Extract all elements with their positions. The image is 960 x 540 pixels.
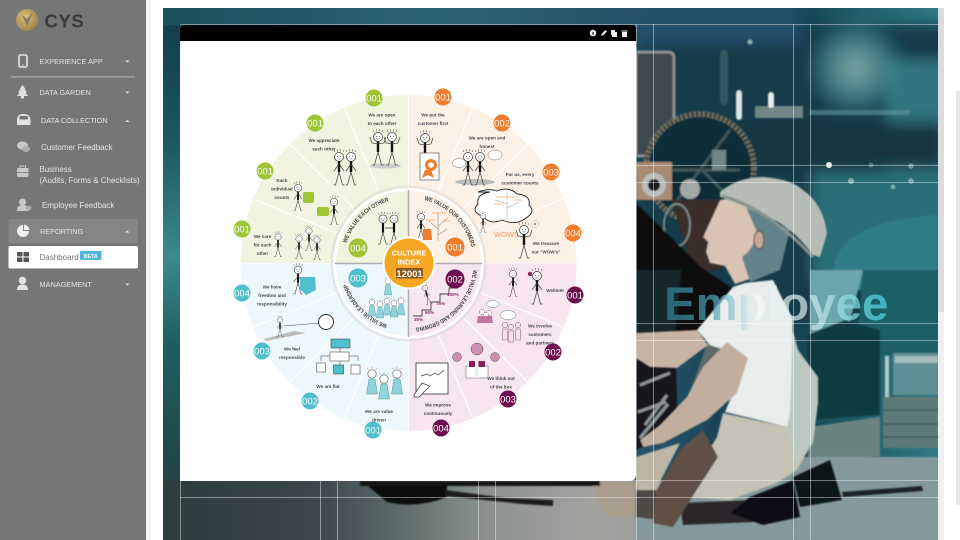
statement: we treasure our wows: We treasure <box>533 241 560 246</box>
statement: we are open to each other: We are open <box>368 112 396 118</box>
statement: we put the customer first: customer first <box>418 121 449 126</box>
center badge: culture index: CULTURE <box>392 248 426 258</box>
statement: we are open and honest: honest <box>479 144 495 149</box>
statement: we appreciate each other: 001 <box>307 118 323 129</box>
menu item: data collection: DATA COLLECTION <box>41 116 108 125</box>
segment: we value each other, outer <box>234 90 401 260</box>
statement: we are open to each other <box>366 90 401 168</box>
statement: we care for each other <box>234 220 321 260</box>
statement: we improve continuously: 004 <box>433 423 449 434</box>
inner segment: we value learning and growing: 100% <box>447 292 459 297</box>
inner segment: we value learning and growing: 002 <box>447 275 463 286</box>
wheel: outer quadrants <box>240 95 576 431</box>
statement: we treasure our wows: 004 <box>565 228 581 239</box>
center badge: culture index <box>382 236 436 290</box>
menu item: data garden: DATA GARDEN <box>40 88 91 97</box>
menu item: dashboard <box>8 246 138 268</box>
menu item: customer feedback <box>17 142 112 152</box>
center badge: culture index: INDEX <box>398 258 420 266</box>
statement: we treasure our wows: our "WOW's" <box>532 250 560 254</box>
statement: we are flat: 002 <box>302 396 318 407</box>
statement: we put the customer first <box>417 88 452 180</box>
panel: culture index card <box>180 25 636 481</box>
statement: for us, every customer counts <box>475 164 560 233</box>
statement: we care for each other: other <box>257 251 268 256</box>
inner segment: we value each other: 004 <box>350 244 366 255</box>
statement: we improve continuously <box>414 363 453 436</box>
center badge: culture index: 12001 <box>396 269 423 280</box>
logo: CYS <box>16 9 84 32</box>
statement: we care for each other: We care <box>254 234 272 239</box>
statement: each individual counts: individual <box>271 186 293 192</box>
menu item: reporting: REPORTING <box>40 227 84 236</box>
statement: we involve customers and partners: and partners <box>526 340 554 346</box>
statement: we think out of the box <box>452 343 516 408</box>
statement: we have freedom and responsibility: freedom and <box>258 293 286 298</box>
statement: we think out of the box: We think out <box>487 376 515 381</box>
statement: we improve continuously: continuously <box>424 411 453 416</box>
statement: we are value driven: We are value <box>365 409 393 414</box>
card toolbar <box>180 25 636 41</box>
menu item: dashboard: BETA <box>84 254 98 260</box>
photo: employee watermark: Employee <box>664 278 888 331</box>
statement: we are open and honest <box>452 114 510 185</box>
menu item: business: Business <box>40 165 72 174</box>
menu item: experience app: EXPERIENCE APP <box>40 57 103 66</box>
statement: we involve customers and partners: customers <box>528 332 552 337</box>
statement: we are flat <box>302 339 360 410</box>
inner segment: we value learning and growing: 75% <box>436 301 445 306</box>
segment: we value learning and growing, outer <box>414 268 584 436</box>
statement: we are open and honest: We are open and <box>469 136 506 140</box>
statement: we are value driven <box>364 367 402 438</box>
statement: wellmet: 001 <box>567 290 583 301</box>
statement: we treasure our wows: WOW!! <box>494 230 518 239</box>
statement: we care for each other: 001 <box>234 224 250 235</box>
statement: we put the customer first: 001 <box>435 92 451 103</box>
wheel: inner ring <box>330 186 486 342</box>
card body <box>180 41 636 481</box>
menu item: management: MANAGEMENT <box>40 280 92 289</box>
menu item: business <box>17 165 140 185</box>
statement: we feel responsible: 003 <box>254 346 270 357</box>
statement: we involve customers and partners: 002 <box>545 347 561 358</box>
menu item: reporting <box>8 219 138 244</box>
statement: each individual counts <box>256 162 338 224</box>
menu item: management <box>17 277 130 290</box>
statement: we have freedom and responsibility: We have <box>263 284 282 290</box>
segment: we value leadership, outer <box>234 263 402 438</box>
statement: we improve continuously: We improve <box>425 402 451 408</box>
inner segment: we value learning and growing: WE VALUE LEARNING AND GROWING <box>416 270 478 332</box>
statement: we appreciate each other: We appreciate <box>308 138 340 143</box>
statement: for us, every customer counts: customer counts <box>501 180 539 186</box>
photo: bokeh lights <box>826 162 914 190</box>
photo: workshop objects <box>636 40 938 462</box>
statement: we are open and honest: 002 <box>494 118 510 129</box>
statement: wellmet: Wellmet <box>546 288 564 293</box>
statement: we appreciate each other: each other <box>312 146 336 152</box>
photo: boy <box>636 177 842 527</box>
statement: we are open to each other: 001 <box>366 93 382 104</box>
statement: for us, every customer counts: For us, every <box>506 172 535 177</box>
inner segment: we value our customers: 001 <box>447 243 463 254</box>
menu item: employee feedback <box>17 198 114 211</box>
scrollbars <box>938 8 960 540</box>
inner segment: we value leadership: 003 <box>350 274 366 285</box>
inner segment: we value learning and growing: 25% <box>414 317 423 322</box>
menu item: business: (Audits, Forms & Checklists) <box>40 176 140 185</box>
statement: we have freedom and responsibility: 004 <box>234 288 250 299</box>
statement: we have freedom and responsibility: responsibility <box>257 302 287 306</box>
statement: we are flat: We are flat <box>316 384 340 389</box>
statement: we think out of the box: 003 <box>500 394 516 405</box>
menu item: dashboard: Dashboard <box>40 253 79 262</box>
layout grid lines <box>180 24 938 540</box>
menu item: employee feedback: Employee Feedback <box>42 201 114 210</box>
statement: we have freedom and responsibility <box>234 263 316 306</box>
statement: we are value driven: 001 <box>365 425 381 436</box>
inner segment: we value leadership: WE VALUE LEADERSHIP <box>344 285 386 328</box>
menu item: data garden <box>17 85 130 98</box>
panel: sidebar navigation <box>0 0 151 540</box>
statement: we involve customers and partners: We involve <box>528 324 552 328</box>
inner segment: we value learning and growing: 50% <box>425 310 434 315</box>
statement: we put the customer first: We put the <box>421 112 445 118</box>
menu item: customer feedback: Customer Feedback <box>41 143 112 152</box>
statement: we involve customers and partners <box>477 300 562 360</box>
inner segment: we value each other <box>342 198 399 258</box>
photo: floor <box>163 481 938 540</box>
statement: each individual counts: 001 <box>257 166 273 177</box>
inner segment: we value each other: WE VALUE EACH OTHER <box>342 198 389 242</box>
inner segment: we value leadership <box>344 268 406 328</box>
inner segment: we value our customers: WE VALUE OUR CUSTOMERS <box>425 196 476 247</box>
segment: we value our customers, outer <box>417 88 582 258</box>
menu item: experience app <box>19 55 130 67</box>
photo: shoe and wrench <box>360 481 923 517</box>
statement: for us, every customer counts: 003 <box>543 167 559 178</box>
statement: we feel responsible: responsible <box>279 355 305 360</box>
statement: we appreciate each other <box>306 114 356 185</box>
statement: each individual counts: counts <box>274 195 290 200</box>
menu item: data collection <box>17 114 130 125</box>
statement: we think out of the box: of the box <box>490 384 512 390</box>
statement: we feel responsible: We feel <box>284 346 300 352</box>
statement: wellmet <box>509 268 584 304</box>
statement: each individual counts: Each <box>277 178 288 183</box>
statement: we are value driven: driven <box>372 418 386 422</box>
statement: we feel responsible <box>254 314 334 360</box>
logo: CYS: CYS <box>44 10 84 32</box>
statement: we are open to each other: to each other <box>368 121 397 126</box>
photo: soft background lighting <box>630 0 956 325</box>
statement: we treasure our wows <box>494 220 582 258</box>
statement: we care for each other: for each <box>254 242 272 248</box>
